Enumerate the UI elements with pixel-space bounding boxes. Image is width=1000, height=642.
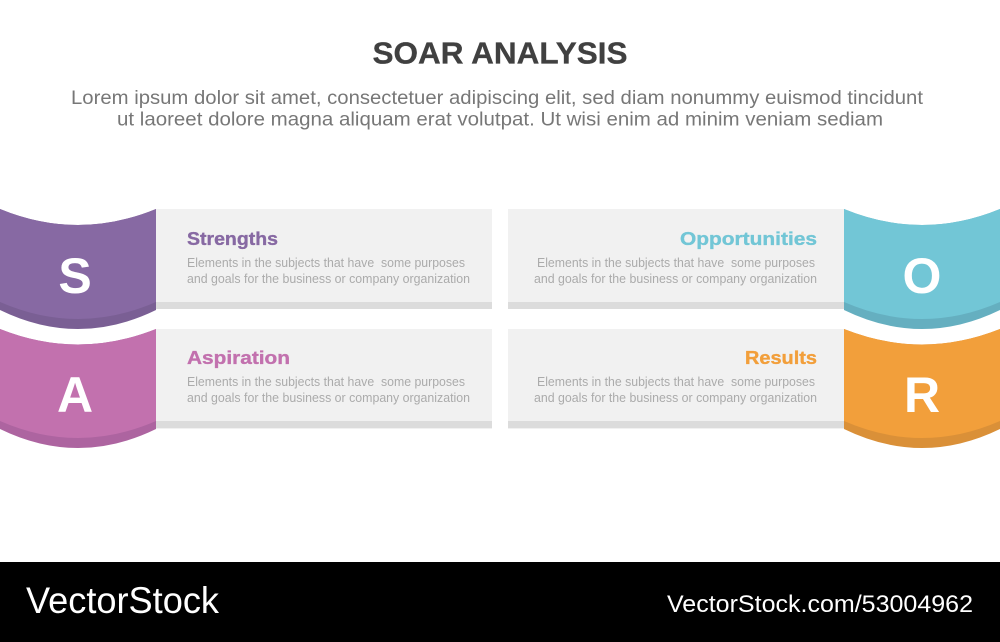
description: results: Elements in the subjects that have some purposes <box>537 374 815 389</box>
subtitle text block: ut laoreet dolore magna aliquam erat volutpat. Ut wisi enim ad minim veniam sediam <box>117 108 883 130</box>
badge: A: A <box>57 367 93 423</box>
description: opportunities <box>534 255 817 286</box>
panel: aspiration <box>0 329 492 448</box>
footer bar <box>0 562 1000 642</box>
description: opportunities: and goals for the business or company organization <box>534 271 817 286</box>
heading: opportunities: Opportunities <box>680 229 817 249</box>
heading: strengths: Strengths <box>187 229 278 249</box>
description: strengths: and goals for the business or company organization <box>187 271 470 286</box>
panel: opportunities <box>508 209 1000 329</box>
description: strengths <box>187 255 470 286</box>
badge: S <box>0 209 156 329</box>
heading: results: Results <box>745 348 817 368</box>
heading: aspiration: Aspiration <box>187 348 290 368</box>
badge: O <box>844 209 1000 329</box>
badge: S: S <box>58 248 92 304</box>
panel: strengths <box>0 209 492 329</box>
description: results: and goals for the business or company organization <box>534 390 817 405</box>
description: results <box>534 374 817 405</box>
panel: results <box>508 329 1000 448</box>
footer logo text: VectorStock <box>26 580 219 621</box>
subtitle text block: Lorem ipsum dolor sit amet, consectetuer adipiscing elit, sed diam nonummy euismod tincidunt <box>71 87 924 109</box>
footer url text: VectorStock.com/53004962 <box>667 591 973 618</box>
badge: O: O <box>903 248 941 304</box>
badge: R <box>844 329 1000 448</box>
description: opportunities: Elements in the subjects that have some purposes <box>537 255 815 270</box>
description: aspiration: Elements in the subjects that have some purposes <box>187 374 465 389</box>
badge: A <box>0 329 156 448</box>
badge: R: R <box>904 367 940 423</box>
title: SOAR ANALYSIS <box>372 36 628 70</box>
description: strengths: Elements in the subjects that have some purposes <box>187 255 465 270</box>
description: aspiration <box>187 374 470 405</box>
description: aspiration: and goals for the business or company organization <box>187 390 470 405</box>
subtitle text block <box>71 87 924 130</box>
